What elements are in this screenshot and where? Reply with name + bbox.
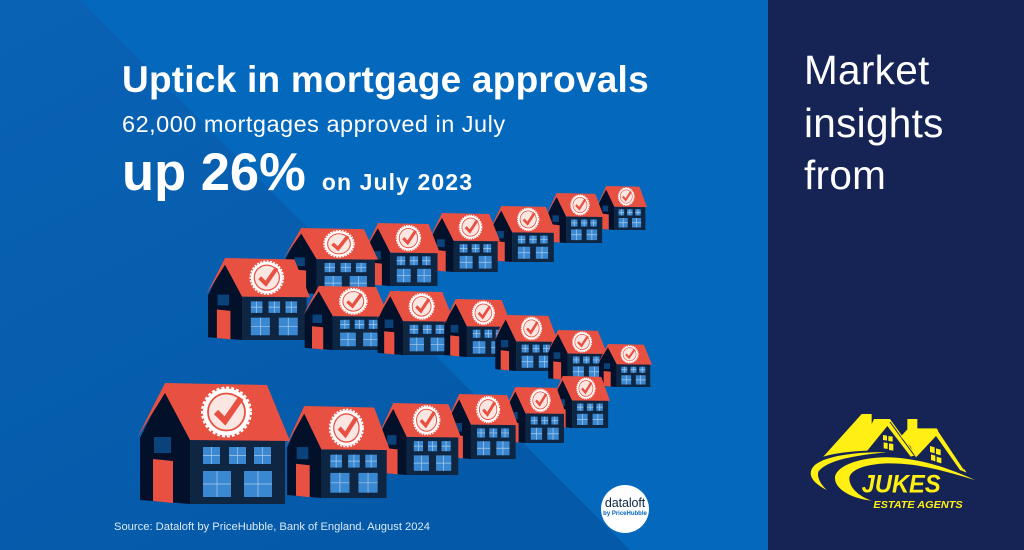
icon: house top row 4 [489, 206, 556, 262]
icon: house top row 1 [284, 228, 378, 294]
icon: house bottom row 2 [285, 406, 390, 498]
background panel [0, 0, 630, 550]
icon: house middle row 6 [547, 330, 607, 380]
house illustration [137, 186, 652, 504]
logo: dataloft: dataloft [605, 496, 645, 510]
logo: Jukes Estate Agents: JUKES [862, 471, 941, 499]
sidebar heading: from [804, 152, 886, 198]
icon: house bottom row 4 [446, 394, 518, 459]
icon: house bottom row 6 [552, 376, 610, 428]
panel: market insights sidebar [768, 0, 1024, 550]
icon: house middle row 2 [303, 286, 389, 350]
icon: house middle row 5 [494, 315, 558, 371]
logo: Jukes Estate Agents: ESTATE AGENTS [873, 500, 963, 511]
logo: dataloft [601, 485, 649, 533]
icon: house bottom row 1 [137, 383, 290, 504]
icon: house middle row 7 [598, 344, 652, 387]
sidebar heading [804, 47, 944, 198]
sidebar heading: Market [804, 47, 930, 93]
logo: Jukes Estate Agents [810, 414, 975, 511]
sidebar heading: insights [804, 100, 944, 146]
icon: house top row 6 [597, 186, 647, 230]
icon: house top row 2 [364, 223, 440, 286]
icon: house top row 3 [429, 213, 500, 272]
logo: dataloft: by PriceHubble [603, 511, 647, 517]
subtitle: 62,000 mortgages approved in July [122, 111, 506, 137]
source note: Source: Dataloft by PriceHubble, Bank of England. August 2024 [114, 521, 430, 533]
icon: house middle row 4 [443, 299, 512, 357]
icon: house middle row 1 [206, 258, 310, 340]
icon: house bottom row 3 [378, 403, 461, 475]
icon: house top row 5 [546, 193, 604, 243]
icon: house middle row 3 [376, 291, 454, 355]
headline stat: up 26% on July 2023 [122, 143, 473, 202]
title: Uptick in mortgage approvals [122, 59, 649, 100]
icon: house bottom row 5 [504, 387, 566, 443]
